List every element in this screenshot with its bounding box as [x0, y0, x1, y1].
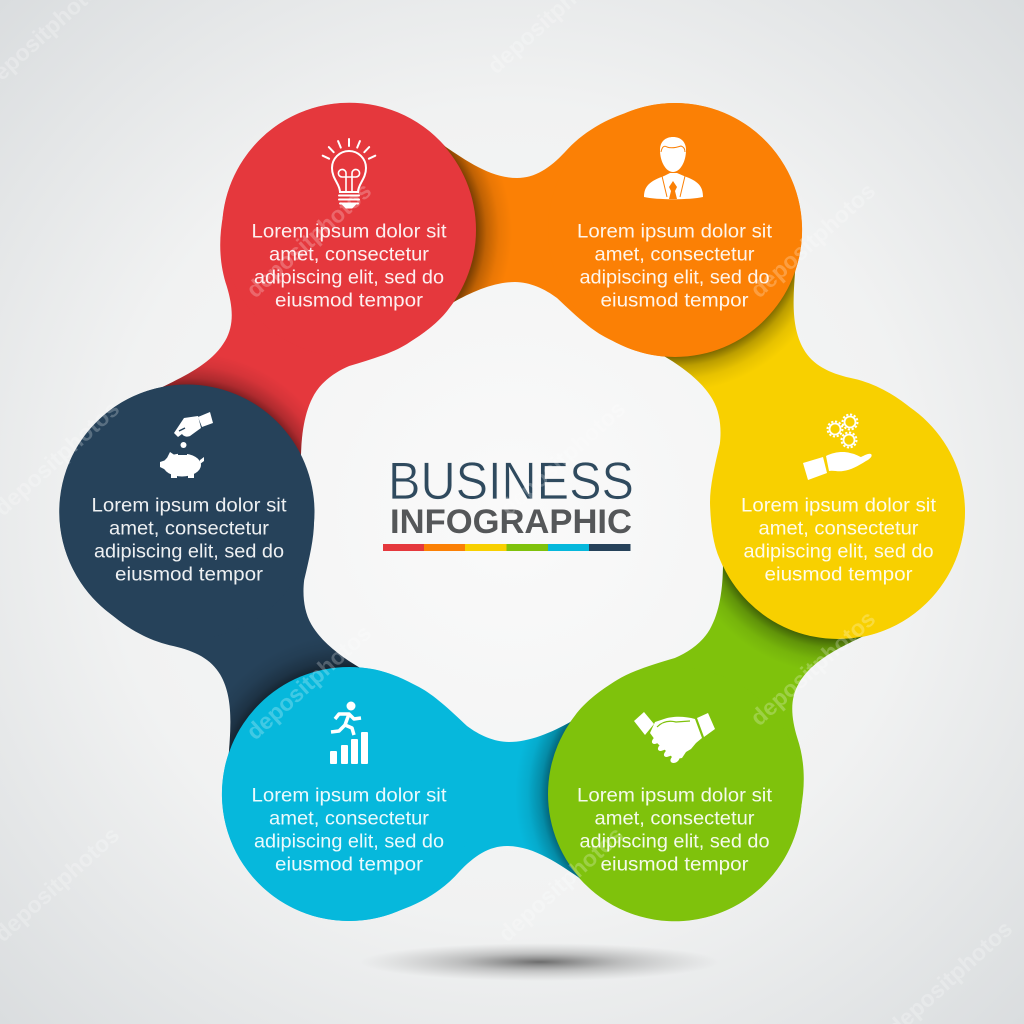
watermark text: depositphotos — [241, 619, 376, 745]
text: orange — [577, 220, 773, 312]
text: yellow: adipiscing elit, sed do — [744, 540, 934, 562]
text: orange: eiusmod tempor — [600, 290, 749, 312]
icon: businessman — [644, 137, 703, 199]
text: green: amet, consectetur — [594, 808, 755, 830]
text: navy: Lorem ipsum dolor sit — [92, 494, 287, 516]
text: blue — [252, 784, 447, 876]
icon: light bulb — [323, 139, 375, 208]
text: red: Lorem ipsum dolor sit — [252, 220, 447, 242]
panel: yellow hand and gears circle — [711, 385, 965, 639]
text: green — [577, 784, 773, 876]
text: blue: adipiscing elit, sed do — [254, 830, 444, 852]
title block — [383, 452, 634, 551]
text: blue: amet, consectetur — [269, 808, 430, 830]
watermark text: depositphotos — [745, 605, 880, 731]
text: red: amet, consectetur — [269, 244, 430, 266]
icon: hand holding gears — [803, 414, 872, 480]
title: business: BUSINESS — [388, 452, 634, 511]
panel: blue growth circle — [222, 667, 476, 921]
text: green: adipiscing elit, sed do — [580, 830, 770, 852]
text: orange: amet, consectetur — [594, 244, 755, 266]
ground shadow — [360, 943, 720, 981]
text: green: Lorem ipsum dolor sit — [577, 784, 773, 806]
icon: runner on rising bars — [330, 702, 368, 764]
panel: red idea circle — [222, 103, 476, 357]
text: yellow: amet, consectetur — [758, 518, 919, 540]
panel: orange person circle — [548, 103, 802, 357]
text: yellow — [741, 494, 937, 586]
text: orange: adipiscing elit, sed do — [580, 266, 770, 288]
panel: green handshake circle — [548, 667, 802, 921]
circle shadows cast on neighbouring bands — [101, 126, 965, 898]
panel: navy savings circle — [60, 384, 314, 640]
subtitle: infographic: INFOGRAPHIC — [390, 503, 632, 541]
watermark text: depositphotos — [495, 395, 630, 521]
text: yellow: eiusmod tempor — [764, 564, 913, 586]
watermark text: depositphotos — [241, 177, 376, 303]
text: navy: adipiscing elit, sed do — [94, 540, 284, 562]
text: red: eiusmod tempor — [275, 290, 424, 312]
text: blue: Lorem ipsum dolor sit — [252, 784, 447, 806]
watermark text: depositphotos — [493, 821, 628, 947]
text: green: eiusmod tempor — [600, 854, 749, 876]
text: navy: eiusmod tempor — [115, 564, 264, 586]
text: orange: Lorem ipsum dolor sit — [577, 220, 773, 242]
watermark text: depositphotos — [745, 177, 880, 303]
text: yellow: Lorem ipsum dolor sit — [741, 494, 937, 516]
colour bar — [383, 544, 630, 551]
text: navy — [92, 494, 287, 586]
text: blue: eiusmod tempor — [275, 854, 424, 876]
text: red — [252, 220, 447, 312]
text: red: adipiscing elit, sed do — [254, 266, 444, 288]
icon: hand and piggy bank — [160, 412, 213, 478]
icon: handshake — [634, 712, 715, 765]
text: navy: amet, consectetur — [109, 518, 270, 540]
